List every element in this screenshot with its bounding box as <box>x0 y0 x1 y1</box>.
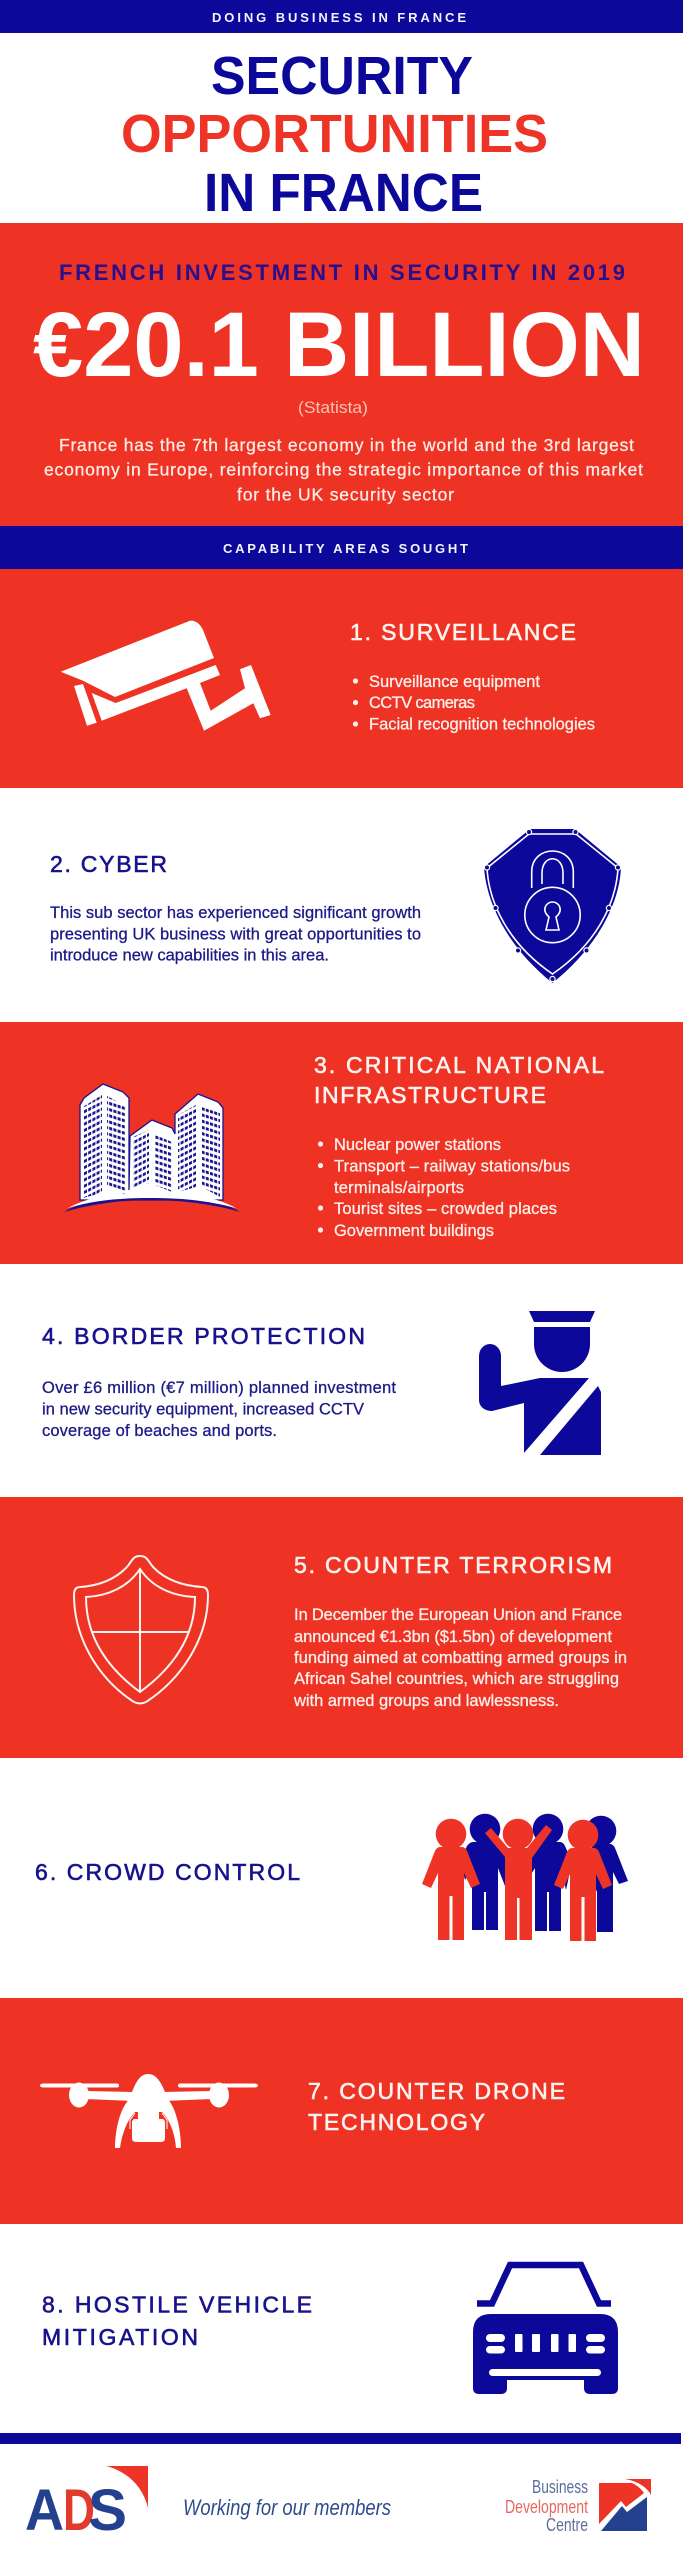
logo: ADS: S <box>88 2478 127 2543</box>
panel: hostile vehicle mitigation <box>0 2224 683 2433</box>
list: surveillance: Facial recognition technologies <box>369 716 595 734</box>
icon: border officer <box>479 1311 601 1455</box>
heading: counter drone technology <box>308 2078 565 2135</box>
icon: drone <box>40 2074 258 2148</box>
text: border protection: Over £6 million (€7 million) planned investment <box>42 1379 396 1397</box>
intro paragraph: for the UK security sector <box>237 484 454 504</box>
list: infrastructure: Transport – railway stations/bus <box>334 1158 570 1176</box>
icon: vehicle <box>473 2265 618 2394</box>
intro paragraph <box>44 435 643 504</box>
logo: business development centre: Development <box>505 2497 588 2517</box>
logo: ADS <box>25 2466 148 2543</box>
text: cyber: introduce new capabilities in this area. <box>50 946 329 964</box>
panel: cyber <box>0 788 683 1022</box>
big number: €20.1 BILLION <box>33 294 645 396</box>
text: counter terrorism: In December the European Union and France <box>294 1606 622 1624</box>
panel: border protection <box>0 1264 683 1497</box>
text: cyber: presenting UK business with great opportunities to <box>50 926 421 944</box>
heading: counter terrorism: 5. COUNTER TERRORISM <box>294 1552 612 1578</box>
title <box>121 46 548 223</box>
title: OPPORTUNITIES <box>121 104 548 164</box>
intro paragraph: France has the 7th largest economy in the world and the 3rd largest <box>59 435 634 455</box>
capability banner <box>0 526 683 569</box>
heading: critical national infrastructure <box>314 1052 604 1108</box>
text: border protection <box>42 1379 396 1440</box>
text: cyber <box>50 904 421 964</box>
list: infrastructure: terminals/airports <box>334 1179 464 1197</box>
list: infrastructure: Nuclear power stations <box>334 1136 501 1154</box>
icon: crowd <box>422 1814 628 1941</box>
heading: crowd control: 6. CROWD CONTROL <box>35 1859 300 1885</box>
list: infrastructure <box>318 1136 570 1240</box>
top banner <box>0 0 683 33</box>
panel: counter drone technology <box>0 1998 683 2224</box>
icon: tower blocks <box>64 1084 240 1212</box>
panel: counter terrorism <box>0 1497 683 1758</box>
heading: critical national infrastructure: INFRASTRUCTURE <box>314 1082 546 1108</box>
heading: hostile vehicle mitigation: 8. HOSTILE VEHICLE <box>42 2292 312 2318</box>
icon: outlined shield <box>74 1556 208 1704</box>
logo: business development centre: Business <box>532 2477 588 2497</box>
text: border protection: in new security equipment, increased CCTV <box>42 1400 364 1418</box>
source: (Statista) <box>298 398 368 417</box>
panel: surveillance <box>0 569 683 788</box>
text: border protection: coverage of beaches and ports. <box>42 1422 277 1440</box>
icon: padlock shield <box>484 829 621 983</box>
logo: ADS: D <box>63 2478 95 2543</box>
logo: ADS: A <box>25 2478 64 2543</box>
heading: critical national infrastructure: 3. CRITICAL NATIONAL <box>314 1052 604 1078</box>
investment heading: FRENCH INVESTMENT IN SECURITY IN 2019 <box>59 260 625 285</box>
panel: critical national infrastructure <box>0 1022 683 1264</box>
list: surveillance: CCTV cameras <box>369 694 475 712</box>
top banner: DOING BUSINESS IN FRANCE <box>212 10 466 25</box>
list: infrastructure: Tourist sites – crowded places <box>334 1200 557 1218</box>
heading: counter drone technology: 7. COUNTER DRONE <box>308 2078 565 2104</box>
text: counter terrorism: funding aimed at combatting armed groups in <box>294 1649 627 1667</box>
list: surveillance <box>353 673 595 734</box>
tagline: Working for our members <box>183 2495 391 2520</box>
heading: surveillance: 1. SURVEILLANCE <box>350 619 576 645</box>
logo: business development centre: Centre <box>546 2515 588 2535</box>
text: counter terrorism <box>293 1606 627 1710</box>
list: infrastructure: Government buildings <box>334 1222 494 1240</box>
heading: border protection: 4. BORDER PROTECTION <box>42 1323 365 1349</box>
heading: counter drone technology: TECHNOLOGY <box>308 2109 485 2135</box>
title: SECURITY <box>211 46 473 106</box>
text: counter terrorism: announced €1.3bn ($1.5bn) of development <box>294 1628 612 1646</box>
panel: french investment <box>0 223 683 526</box>
capability banner: CAPABILITY AREAS SOUGHT <box>223 541 468 556</box>
intro paragraph: economy in Europe, reinforcing the strategic importance of this market <box>44 460 643 480</box>
heading: cyber: 2. CYBER <box>50 851 167 877</box>
icon: cctv camera <box>61 621 271 731</box>
list: surveillance: Surveillance equipment <box>369 673 540 691</box>
panel: crowd control <box>0 1758 683 1998</box>
footer rule <box>0 2433 681 2444</box>
heading: hostile vehicle mitigation <box>42 2292 312 2350</box>
title: IN FRANCE <box>204 163 483 223</box>
text: counter terrorism: with armed groups and lawlessness. <box>293 1692 559 1710</box>
heading: hostile vehicle mitigation: MITIGATION <box>42 2324 198 2350</box>
logo: business development centre <box>505 2477 651 2535</box>
text: cyber: This sub sector has experienced significant growth <box>50 904 421 922</box>
text: counter terrorism: African Sahel countries, which are struggling <box>294 1670 619 1688</box>
